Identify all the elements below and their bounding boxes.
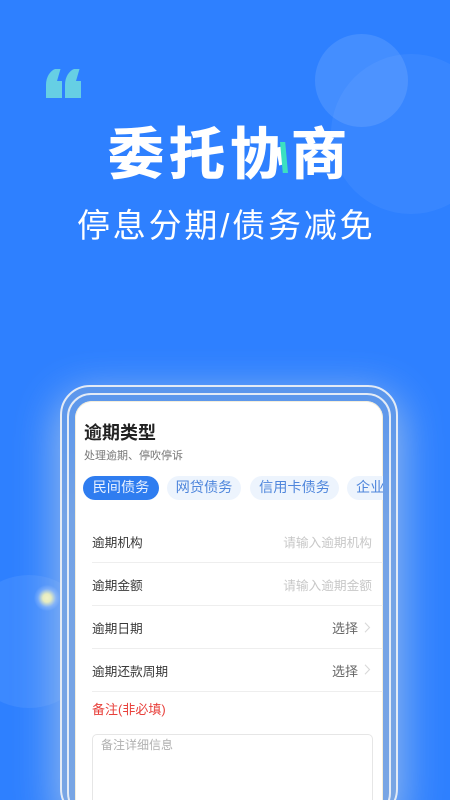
title accent — [280, 142, 288, 173]
decorative circle top right — [315, 34, 408, 127]
remark input box — [92, 734, 373, 800]
heading: 逾期类型 — [84, 423, 156, 443]
subheading: 处理逾期、停吹停诉 — [84, 450, 183, 462]
icon: chevron — [364, 664, 370, 674]
row label: 逾期日期 — [92, 622, 143, 636]
row label: 逾期金额 — [92, 579, 143, 593]
icon: sparkle — [34, 585, 60, 611]
phone screen — [75, 401, 383, 800]
row label: 逾期还款周期 — [92, 665, 168, 679]
icon: chevron — [364, 622, 370, 632]
phone frame inner — [67, 393, 391, 800]
tab: 信用卡债务 — [259, 480, 330, 496]
row placeholder: 请输入逾期机构 — [283, 536, 372, 550]
tab: active — [83, 476, 159, 500]
decorative circle left — [0, 575, 95, 708]
tab: cut off — [347, 476, 407, 500]
tab — [250, 476, 339, 500]
row label: 逾期机构 — [92, 536, 143, 550]
subtitle: 停息分期/债务减免 — [77, 207, 375, 244]
tab: 网贷债务 — [176, 480, 232, 496]
remark placeholder: 备注详细信息 — [101, 738, 173, 752]
row value: 选择 — [332, 621, 358, 636]
row value: 选择 — [332, 664, 358, 679]
tab: active: 民间债务 — [93, 480, 149, 496]
row placeholder: 请输入逾期金额 — [283, 579, 372, 593]
icon: quotation mark — [46, 69, 81, 98]
title: 委托协商 — [108, 123, 352, 186]
tab — [167, 476, 241, 500]
phone frame outer — [60, 385, 398, 800]
decorative circle right — [331, 54, 450, 214]
remark label: 备注(非必填) — [92, 702, 166, 717]
